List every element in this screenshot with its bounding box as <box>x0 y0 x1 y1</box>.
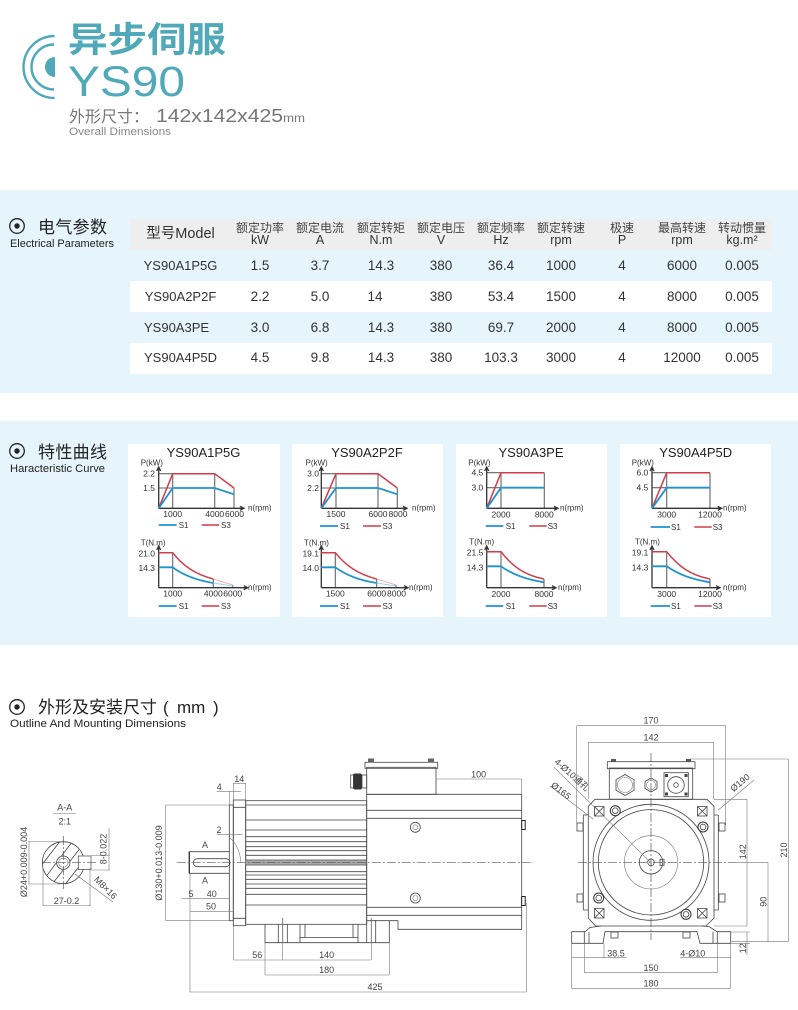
chart panel: YS90A1P5G: 21.0 <box>138 549 155 559</box>
text: dimensions English: Overall Dimensions <box>69 126 172 138</box>
chart panel: YS90A2P2F: 8000 <box>389 509 408 519</box>
chart panel: YS90A3PE: YS90A3PE <box>498 445 564 460</box>
table: parameter table: A <box>316 233 325 247</box>
chart panel: YS90A3PE: 3.0 <box>471 482 484 492</box>
table: parameter table: 3.0 <box>251 320 269 335</box>
dimension lines: 38.5 <box>607 948 625 958</box>
table: parameter table: 5.0 <box>311 289 329 304</box>
panel: outline and mounting heading <box>10 698 219 730</box>
chart panel: YS90A1P5G: 1.5 <box>143 483 155 493</box>
panel: title block <box>24 21 305 138</box>
dimension lines: 56 <box>252 950 262 960</box>
dimension lines: 4 <box>217 782 222 792</box>
chart panel: YS90A2P2F: 6000 <box>369 509 388 519</box>
table: parameter table: 0.005 <box>725 258 759 273</box>
subheading: characteristic curve: Haracteristic Curve <box>10 463 105 475</box>
chart panel: YS90A3PE: P(kW) <box>468 459 491 468</box>
chart panel: YS90A1P5G: 1000 <box>163 588 182 598</box>
drawing: A-A shaft section: A-A <box>57 802 72 812</box>
feet <box>572 926 731 943</box>
terminal box <box>351 758 438 794</box>
table: parameter table: 36.4 <box>488 258 515 273</box>
dimension lines: 4-Ø10通孔 <box>553 757 591 793</box>
chart panel: YS90A1P5G: 6000 <box>225 509 244 519</box>
table: parameter table: 0.005 <box>725 350 759 365</box>
table: parameter table: 额定转速 <box>537 220 585 235</box>
drawing: A-A shaft section: 2:1 <box>58 817 71 827</box>
table: parameter table: 0.005 <box>725 289 759 304</box>
chart panel: YS90A2P2F: n(rpm) <box>412 504 436 512</box>
chart panel: YS90A2P2F: 6000 <box>367 588 386 598</box>
chart panel: YS90A3PE: T(N.m) <box>469 538 495 546</box>
dimension lines: 150 <box>643 963 659 973</box>
table: parameter table: 380 <box>430 289 452 304</box>
dimension lines: 40 <box>207 889 217 899</box>
dimension lines: 140 <box>319 950 334 960</box>
table: parameter table: 4 <box>618 258 626 273</box>
chart panel: YS90A4P5D: YS90A4P5D <box>659 445 732 460</box>
chart panel: YS90A2P2F: 3.0 <box>307 468 319 478</box>
table: parameter table: 额定转矩 <box>357 220 405 235</box>
chart panel: YS90A3PE <box>456 444 607 617</box>
dimension lines: 180 <box>319 965 334 975</box>
table: parameter table: YS90A2P2F <box>145 289 216 304</box>
table: parameter table: 2.2 <box>251 289 269 304</box>
chart panel: YS90A3PE: 8000 <box>535 589 554 599</box>
drawing: A-A shaft section: 8-0.022 <box>98 834 108 864</box>
text: dimensions: 外形尺寸： <box>69 108 149 126</box>
table: parameter table: 极速 <box>610 221 634 235</box>
chart panel: YS90A1P5G: P(kW) <box>141 459 163 468</box>
dimension lines: 90 <box>758 897 768 907</box>
chart panel: YS90A3PE: S1 <box>506 602 516 611</box>
chart panel: YS90A2P2F: S1 <box>340 522 350 531</box>
drawing: A-A shaft section: 27-0.2 <box>54 896 79 906</box>
table: parameter table: 8000 <box>667 289 697 304</box>
table: parameter table: 最高转速 <box>658 220 706 235</box>
table: parameter table: N.m <box>370 233 392 247</box>
table: parameter table: 53.4 <box>488 289 515 304</box>
panel: electrical parameters band <box>0 190 798 393</box>
dimension lines <box>154 769 527 992</box>
chart panel: YS90A1P5G: T(N.m) <box>141 539 166 548</box>
drawing: motor front view <box>549 715 789 988</box>
heading: outline dimensions: ) <box>213 698 219 717</box>
chart panel: YS90A4P5D: 3000 <box>657 510 676 520</box>
table: parameter table: 14.3 <box>368 258 394 273</box>
table: parameter table: 103.3 <box>484 350 518 365</box>
chart panel: YS90A1P5G: S3 <box>221 602 231 611</box>
chart panel: YS90A4P5D: S1 <box>671 523 681 532</box>
shaft <box>189 852 230 873</box>
chart panel: YS90A2P2F <box>292 444 443 617</box>
chart panel: YS90A3PE: 4.5 <box>471 468 484 478</box>
chart panel: YS90A1P5G: n(rpm) <box>248 504 272 512</box>
chart panel: YS90A4P5D: 19.1 <box>632 548 649 558</box>
chart panel: YS90A1P5G: 14.3 <box>138 563 155 573</box>
chart panel: YS90A4P5D: 3000 <box>657 589 676 599</box>
rear housing <box>367 794 525 929</box>
chart panel: YS90A1P5G: 4000 <box>204 588 223 598</box>
chart panel: YS90A3PE: 8000 <box>535 510 554 520</box>
chart panel: YS90A1P5G: S1 <box>179 602 189 611</box>
table: parameter table: 1500 <box>546 289 576 304</box>
dimension lines: 12 <box>738 943 748 953</box>
chart panel: YS90A2P2F: S3 <box>382 602 393 611</box>
heading: model name: YS90 <box>68 58 185 106</box>
chart panel: YS90A4P5D: S3 <box>713 602 723 611</box>
chart panel: YS90A4P5D <box>620 444 771 617</box>
table: parameter table: kW <box>251 233 269 247</box>
table: parameter table: 4 <box>618 350 626 365</box>
chart panel: YS90A4P5D: 14.3 <box>632 562 649 572</box>
chart panel: YS90A1P5G: S1 <box>179 521 189 530</box>
chart panel: YS90A2P2F: YS90A2P2F <box>331 445 403 460</box>
drawing: A-A shaft section: Ø24+0.009-0.004 <box>19 827 29 897</box>
chart panel: YS90A2P2F: n(rpm) <box>409 583 433 592</box>
table: parameter table: kg.m² <box>726 233 758 247</box>
icon: section bullet <box>10 219 24 233</box>
chart panel: YS90A3PE: S3 <box>548 522 558 531</box>
table: parameter table: Hz <box>493 233 509 247</box>
chart panel: YS90A3PE: n(rpm) <box>560 504 584 512</box>
dimension lines: 142 <box>643 732 659 742</box>
chart panel: YS90A4P5D: 12000 <box>698 510 722 520</box>
chart panel: YS90A1P5G <box>128 444 280 617</box>
chart panel: YS90A3PE: S3 <box>548 602 558 611</box>
heading: characteristic curve: 特性曲线 <box>38 443 107 462</box>
heading: product type: 异步伺服 <box>68 21 226 60</box>
table: parameter table <box>130 219 772 374</box>
chart panel: YS90A4P5D: S1 <box>671 602 681 611</box>
table: parameter table: 2000 <box>546 320 576 335</box>
dimension lines: Ø190 <box>728 772 752 794</box>
chart panel: YS90A2P2F: 8000 <box>387 588 406 598</box>
table: parameter table: 6.8 <box>311 320 329 335</box>
chart panel: YS90A4P5D: P(kW) <box>632 459 654 468</box>
table: parameter table: 14.3 <box>368 320 394 335</box>
chart panel: YS90A2P2F: 1500 <box>326 588 345 598</box>
table: parameter table: 380 <box>430 320 452 335</box>
terminal box front <box>607 759 695 799</box>
motor finned body <box>246 801 367 924</box>
dimension lines: 180 <box>643 978 659 988</box>
drawing: A-A shaft section <box>19 802 119 906</box>
table: parameter table: rpm <box>550 233 572 247</box>
table: parameter table: 8000 <box>667 320 697 335</box>
table: parameter table: 转动惯量 <box>718 220 766 235</box>
table: parameter table: 型号Model <box>146 225 215 242</box>
square housing <box>583 799 718 926</box>
chart panel: YS90A4P5D: 4.5 <box>636 482 649 492</box>
chart panel: YS90A3PE: 14.3 <box>467 562 484 572</box>
dimension lines: 14 <box>234 774 244 784</box>
table: parameter table: 额定频率 <box>477 220 525 235</box>
dimension lines: Ø165 <box>549 780 573 801</box>
table: parameter table: 0.005 <box>725 320 759 335</box>
chart panel: YS90A4P5D: S3 <box>713 523 723 532</box>
table: parameter table: 3.7 <box>311 258 329 273</box>
chart panel: YS90A3PE: 21.5 <box>467 548 484 558</box>
drawing: motor side view <box>154 758 533 992</box>
chart panel: YS90A4P5D: T(N.m) <box>635 538 660 546</box>
heading: outline dimensions: ( <box>163 698 169 717</box>
table: parameter table: 14 <box>367 289 383 304</box>
flange <box>229 800 246 926</box>
heading: electrical parameters: 电气参数 <box>38 218 107 237</box>
table: parameter table: P <box>618 233 626 247</box>
table: parameter table: rpm <box>671 233 693 247</box>
table: parameter table: 1000 <box>546 258 576 273</box>
table: parameter table: 4 <box>618 289 626 304</box>
heading: outline dimensions: 外形及安装尺寸 <box>38 698 157 717</box>
table: parameter table: 380 <box>430 258 452 273</box>
chart panel: YS90A2P2F: 19.1 <box>302 549 319 559</box>
chart panel: YS90A1P5G: 2.2 <box>143 468 155 478</box>
chart panel: YS90A1P5G: 6000 <box>223 588 242 598</box>
chart panel: YS90A1P5G: n(rpm) <box>248 583 272 592</box>
table: parameter table: 4 <box>618 320 626 335</box>
dimension lines: A <box>202 840 208 850</box>
table: parameter table: 额定功率 <box>236 220 284 235</box>
dimension lines: 100 <box>471 769 486 779</box>
chart panel: YS90A2P2F: 14.0 <box>302 563 319 573</box>
chart panel: YS90A4P5D: n(rpm) <box>723 583 747 592</box>
dimension lines: 170 <box>643 715 659 725</box>
chart panel: YS90A2P2F: 2.2 <box>307 483 319 493</box>
dimension lines: A <box>202 876 208 886</box>
text: dimensions value: 142x142x425 <box>156 106 283 126</box>
text: dimensions unit: mm <box>283 111 305 125</box>
icon: section bullet <box>10 444 24 458</box>
icon: concentric arcs logo <box>24 36 55 98</box>
chart panel: YS90A2P2F: P(kW) <box>306 459 328 468</box>
chart panel: YS90A4P5D: n(rpm) <box>723 504 747 512</box>
dimension lines: 210 <box>779 842 789 858</box>
chart panel: YS90A4P5D: 12000 <box>698 589 722 599</box>
subheading: outline dimensions: Outline And Mounting Dimensions <box>10 718 187 730</box>
dimension lines: 2 <box>216 825 222 835</box>
table: parameter table: 69.7 <box>488 320 514 335</box>
dimension lines: 50 <box>206 902 216 912</box>
drawing: A-A shaft section: M8×16 <box>92 875 119 901</box>
dimension lines: 5 <box>188 889 194 899</box>
chart panel: YS90A1P5G: YS90A1P5G <box>167 445 240 460</box>
table: parameter table: 1.5 <box>251 258 269 273</box>
table: parameter table: 380 <box>430 350 452 365</box>
chart panel: YS90A3PE: 2000 <box>492 589 511 599</box>
table: parameter table: 4.5 <box>251 350 269 365</box>
chart panel: YS90A1P5G: 4000 <box>205 509 224 519</box>
chart panel: YS90A3PE: S1 <box>506 522 516 531</box>
subheading: electrical parameters: Electrical Parameters <box>10 238 114 250</box>
table: parameter table: 14.3 <box>368 350 394 365</box>
table: parameter table: 额定电流 <box>296 220 344 235</box>
dimension lines: 425 <box>367 982 383 992</box>
dimension lines: 4-Ø10 <box>680 948 705 958</box>
table: parameter table: 12000 <box>663 350 701 365</box>
table: parameter table: V <box>437 233 446 247</box>
chart panel: YS90A4P5D: 6.0 <box>636 468 649 478</box>
chart panel: YS90A2P2F: 1500 <box>327 509 346 519</box>
icon: section bullet <box>10 700 24 714</box>
dimension lines <box>549 715 789 988</box>
table: parameter table: YS90A1P5G <box>144 258 217 273</box>
mounting holes <box>577 806 725 919</box>
panel: characteristic curves band <box>0 421 798 645</box>
table: parameter table: 3000 <box>546 350 576 365</box>
table: parameter table: 9.8 <box>311 350 329 365</box>
dimension lines: 142 <box>738 844 748 859</box>
table: parameter table: YS90A4P5D <box>144 350 217 365</box>
chart panel: YS90A2P2F: S1 <box>340 602 350 611</box>
chart panel: YS90A1P5G: 1000 <box>163 509 182 519</box>
chart panel: YS90A3PE: 2000 <box>492 510 511 520</box>
dimension lines: Ø130+0.013-0.009 <box>154 825 164 901</box>
table: parameter table: 6000 <box>667 258 697 273</box>
mounting foot <box>265 918 389 943</box>
table: parameter table: 额定电压 <box>417 220 465 235</box>
chart panel: YS90A1P5G: S3 <box>221 521 231 530</box>
chart panel: YS90A2P2F: T(N.m) <box>304 539 329 548</box>
chart panel: YS90A3PE: n(rpm) <box>558 583 582 592</box>
chart panel: YS90A2P2F: S3 <box>382 522 393 531</box>
table: parameter table: YS90A3PE <box>144 320 209 335</box>
heading: outline dimensions: mm <box>177 698 205 717</box>
